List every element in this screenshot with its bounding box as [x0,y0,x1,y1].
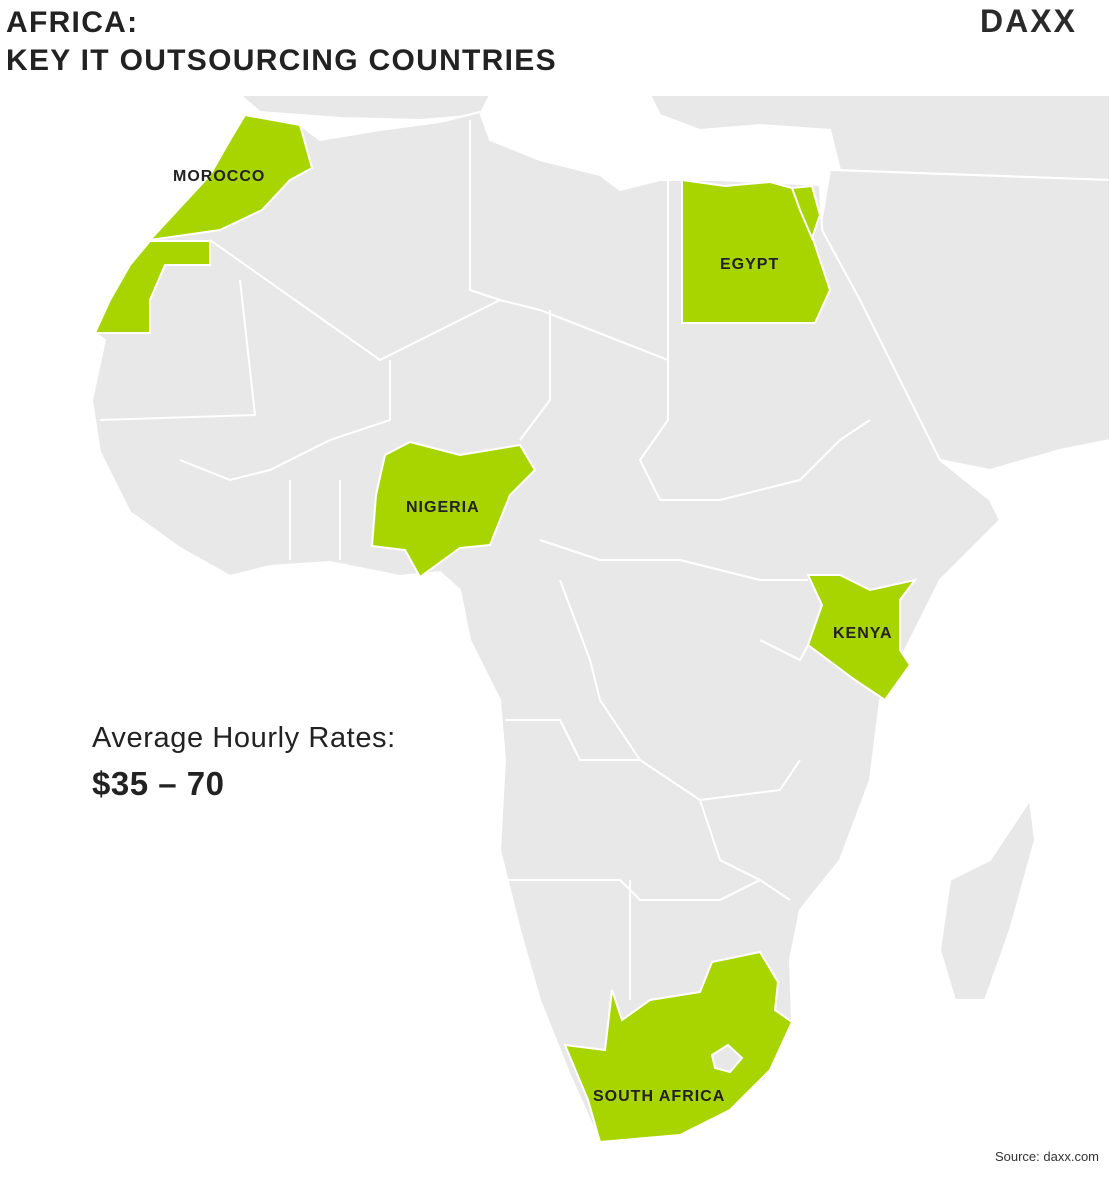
source: Source: daxx.com [995,1149,1099,1164]
middle east / arabia [820,170,1110,470]
egypt [682,180,830,323]
morocco [150,115,312,240]
africa [92,112,1000,1142]
country labels: NIGERIA [406,499,480,516]
country labels: MOROCCO [173,168,265,185]
borders [100,120,870,1000]
highlighted countries [95,115,915,1142]
madagascar [940,800,1035,1000]
rates text: $35 – 70 [92,765,224,802]
south africa [565,952,792,1142]
logo: DAXX [980,3,1077,39]
title: KEY IT OUTSOURCING COUNTRIES [6,44,557,77]
nigeria [372,442,535,577]
country labels: KENYA [833,625,893,642]
title [6,6,557,77]
country labels: EGYPT [720,256,779,273]
country labels: SOUTH AFRICA [593,1088,725,1105]
title: AFRICA: [6,6,138,39]
western sahara [95,241,210,333]
europe pieces [240,95,490,120]
country labels [173,168,893,1105]
rates text [92,722,396,802]
sinai [792,186,820,238]
kenya [808,575,915,700]
lesotho [712,1045,742,1072]
rates text: Average Hourly Rates: [92,722,396,754]
